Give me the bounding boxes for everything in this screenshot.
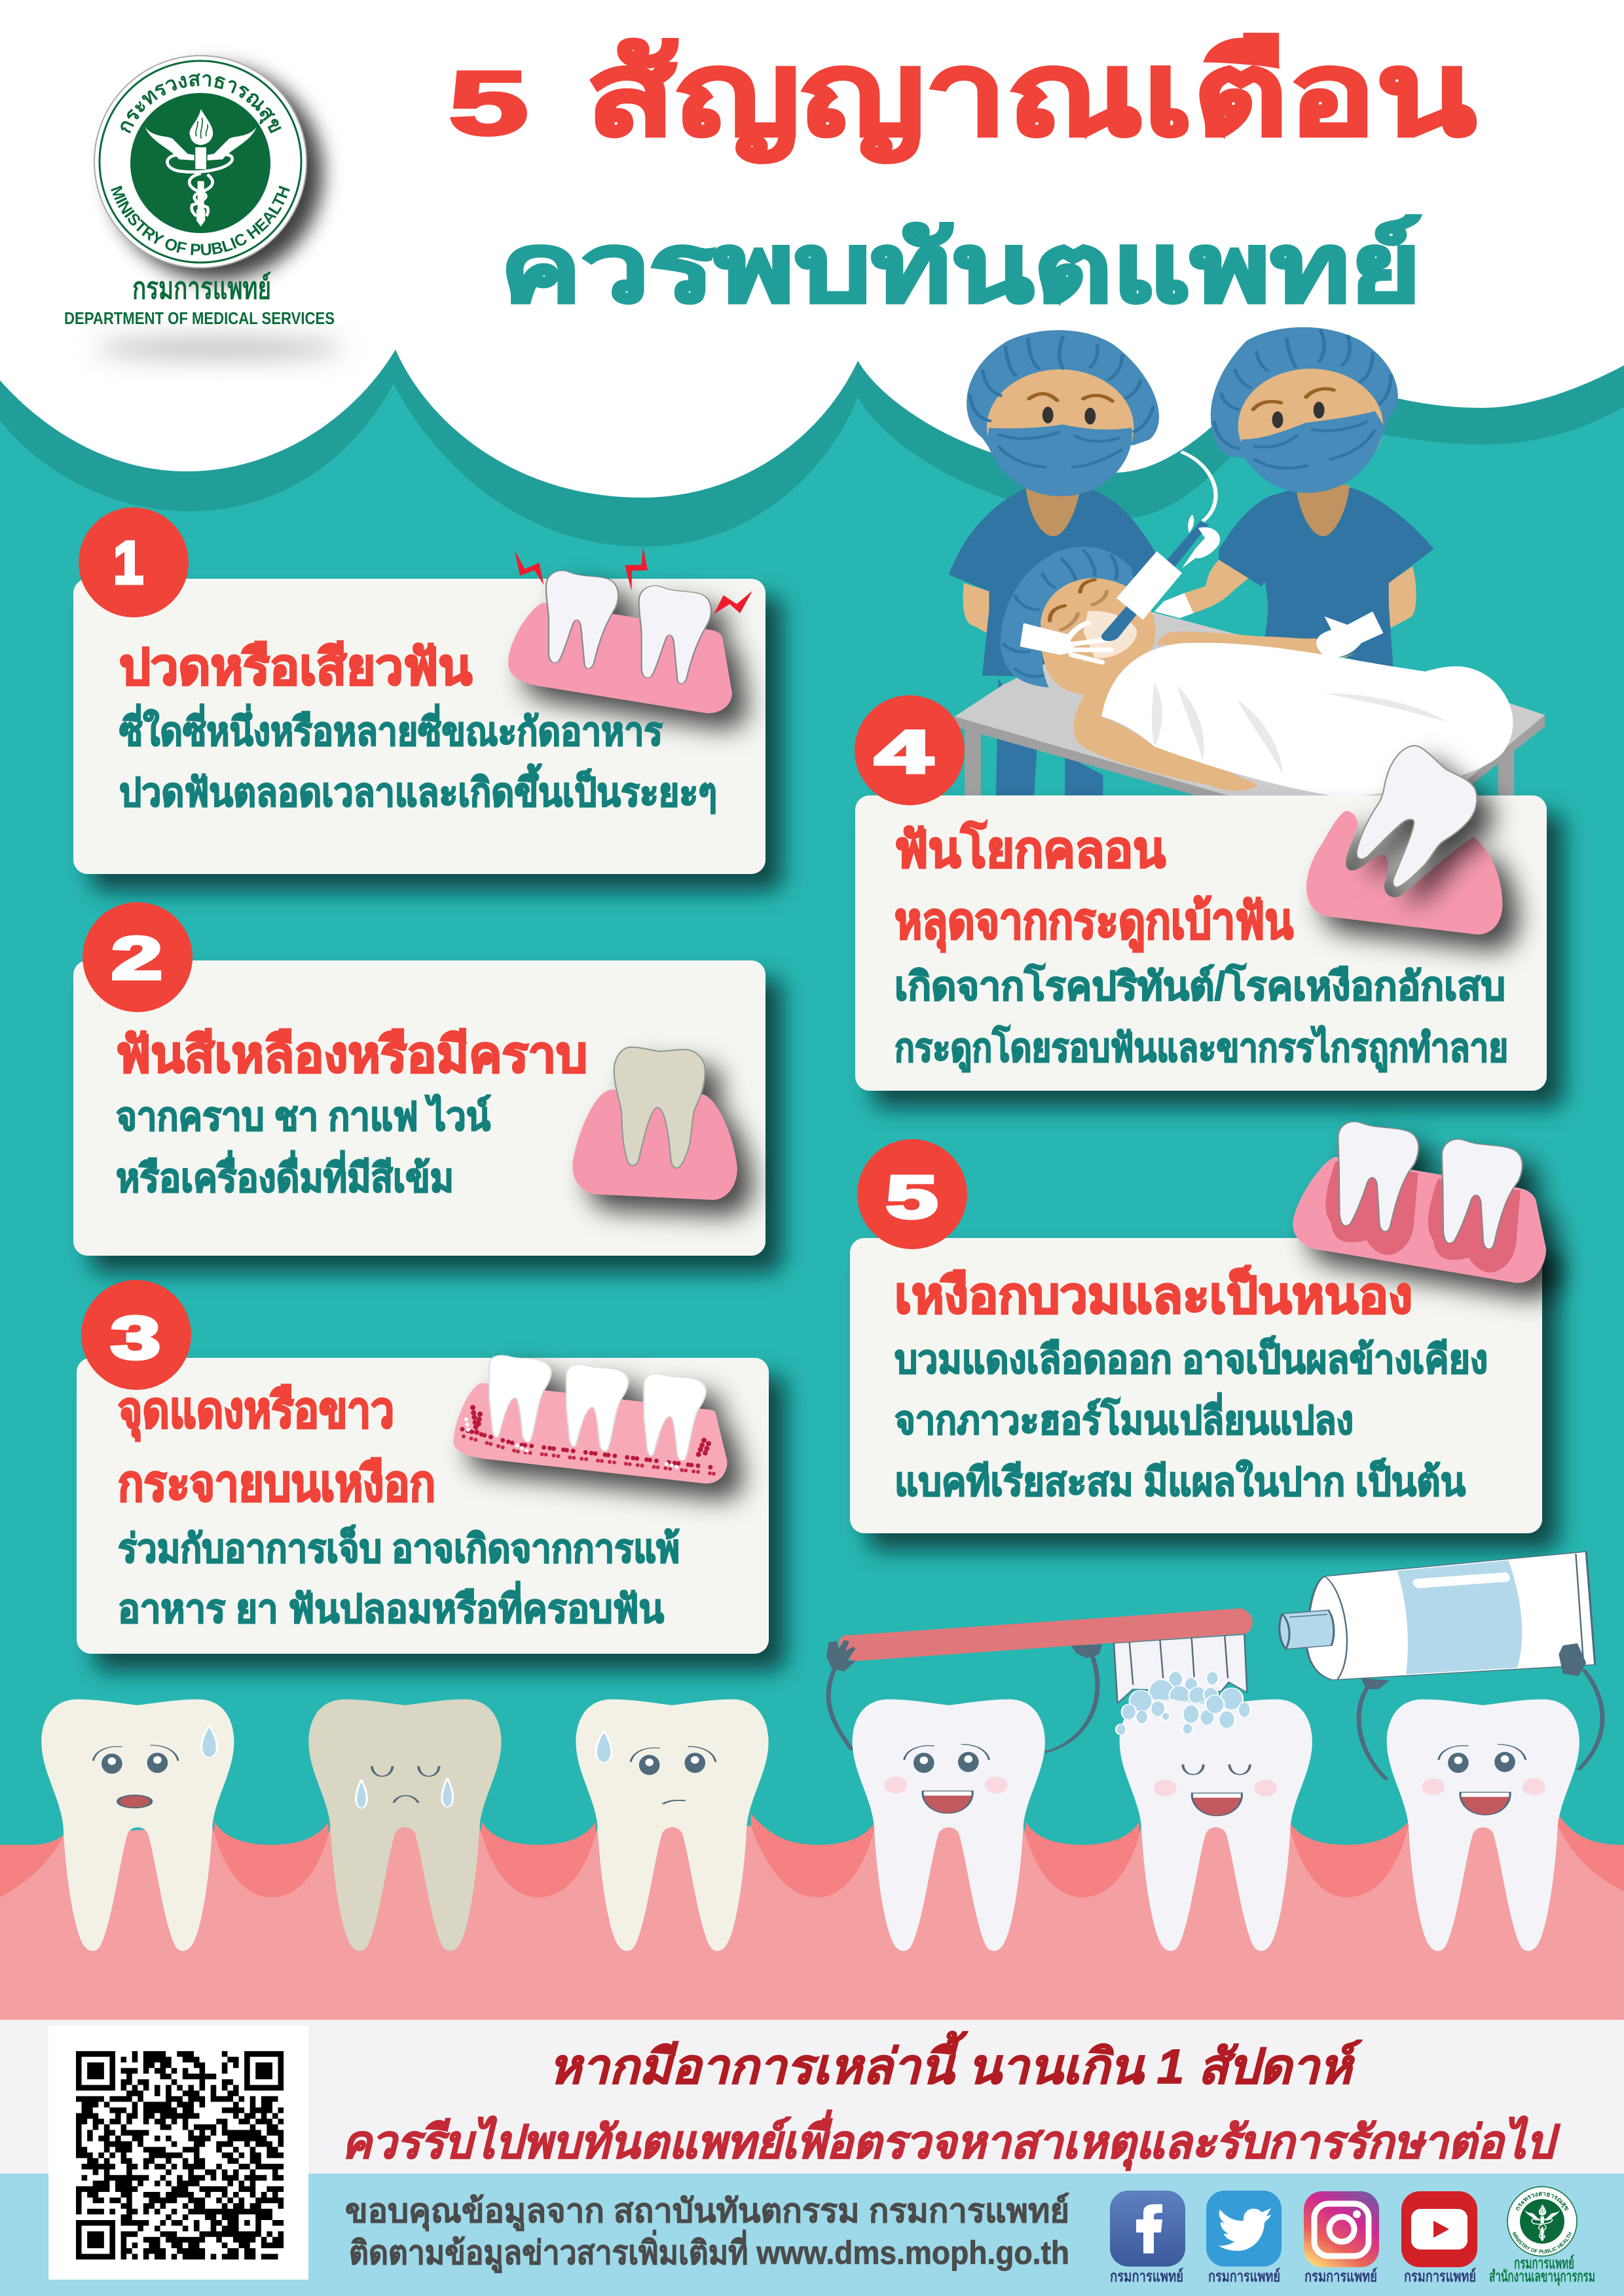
tooth 4: happy bbox=[853, 1700, 1045, 1951]
brush bubbles overlay bbox=[1116, 1688, 1251, 1735]
toothbrush handle bbox=[839, 1609, 1253, 1661]
body line 2: กระดูกโดยรอบฟันและขากรรไกรถูกทำลาย bbox=[895, 1025, 1508, 1072]
warning line 2: ควรรีบไปพบทันตแพทย์เพื่อตรวจหาสาเหตุและรับการรักษาต่อไป bbox=[342, 2109, 1560, 2171]
body line 2: อาหาร ยา ฟันปลอมหรือที่ครอบฟัน bbox=[118, 1581, 664, 1631]
department name thai: กรมการแพทย์ bbox=[132, 271, 271, 305]
number badge 4 bbox=[855, 695, 965, 805]
body line 1: บวมแดงเลือดออก อาจเป็นผลข้างเคียง bbox=[895, 1336, 1488, 1381]
body line 2: หรือเครื่องดื่มที่มีสีเข้ม bbox=[116, 1150, 454, 1200]
icon: loose tooth in gum bbox=[1306, 746, 1502, 934]
icon: swollen gums bbox=[1293, 1122, 1546, 1283]
title line 1 bbox=[449, 29, 1476, 163]
patient bbox=[1001, 547, 1513, 797]
heading line 1: จุดแดงหรือขาว bbox=[118, 1383, 394, 1442]
number badge 1: 1 bbox=[113, 530, 143, 596]
number badge 3 bbox=[81, 1280, 191, 1390]
panel 3: red or white spots bbox=[77, 1280, 769, 1654]
card background bbox=[73, 960, 766, 1256]
small ministry seal: MINISTRY OF PUBLIC HEALTH bbox=[1513, 2231, 1572, 2253]
qr code bbox=[48, 2026, 308, 2280]
arms bbox=[828, 1654, 1602, 1779]
toothpaste tube bbox=[1280, 1552, 1595, 1680]
toothbrush bristles bbox=[1114, 1635, 1247, 1704]
number badge 1 bbox=[79, 507, 189, 617]
seal: กระทรวงสาธารณสุข bbox=[120, 73, 282, 134]
icon: twitter bbox=[1206, 2191, 1282, 2286]
icon: youtube bbox=[1401, 2191, 1477, 2286]
footer band: credits bbox=[0, 2174, 1624, 2296]
seal: MINISTRY OF PUBLIC HEALTH bbox=[111, 185, 290, 255]
illustration: dentists treating patient bbox=[949, 327, 1545, 797]
number badge 5 bbox=[857, 1139, 967, 1249]
card background bbox=[77, 1358, 769, 1654]
body line 2: จากภาวะฮอร์โมนเปลี่ยนแปลง bbox=[895, 1393, 1354, 1442]
body line 2: ปวดฟันตลอดเวลาและเกิดขึ้นเป็นระยะๆ bbox=[119, 763, 717, 814]
heading line 2: กระจายบนเหงือก bbox=[118, 1456, 435, 1512]
icon: twitter: กรมการแพทย์ bbox=[1208, 2267, 1280, 2286]
body line 1: เกิดจากโรคปริทันต์/โรคเหงือกอักเสบ bbox=[895, 963, 1505, 1008]
department name english: DEPARTMENT OF MEDICAL SERVICES bbox=[64, 308, 335, 328]
seal bbox=[94, 51, 333, 295]
body line 1: จากคราบ ชา กาแฟ ไวน์ bbox=[116, 1093, 491, 1139]
small ministry seal bbox=[1489, 2186, 1595, 2287]
panel 5: swollen gums bbox=[850, 1122, 1546, 1533]
body line 3: แบคทีเรียสะสม มีแผลในปาก เป็นต้น bbox=[895, 1458, 1466, 1504]
panel 4: loose tooth bbox=[855, 695, 1547, 1091]
icon: instagram: กรมการแพทย์ bbox=[1304, 2267, 1377, 2286]
icon: spotted gums bbox=[453, 1355, 728, 1484]
tooth 6: happy bbox=[1387, 1700, 1579, 1951]
wave: white header area bbox=[0, 0, 1624, 498]
card background bbox=[855, 795, 1547, 1091]
table bbox=[955, 611, 1545, 797]
gums band bbox=[0, 1813, 1624, 2020]
doctor 1 bbox=[949, 330, 1159, 795]
dental hose bbox=[1181, 452, 1216, 521]
small ministry seal: กรมการแพทย์ bbox=[1514, 2254, 1574, 2272]
icon: aching teeth bbox=[508, 571, 732, 713]
panel 2: stained teeth bbox=[73, 902, 766, 1256]
gloves and dental scaler bbox=[1020, 515, 1383, 662]
body line 1: ซี่ใดซี่หนึ่งหรือหลายซี่ขณะกัดอาหาร bbox=[119, 704, 663, 754]
heading: ฟันสีเหลืองหรือมีคราบ bbox=[116, 1027, 587, 1083]
icon: pain sparks bbox=[515, 547, 752, 614]
title line 1: สัญญาณเตือน bbox=[586, 29, 1476, 163]
website line: ติดตามข้อมูลข่าวสารเพิ่มเติมที่ www.dms.moph.go.th bbox=[349, 2230, 1069, 2273]
tooth 3: worried bbox=[576, 1700, 769, 1951]
tooth 1: surprised bbox=[41, 1700, 234, 1951]
heading: เหงือกบวมและเป็นหนอง bbox=[895, 1266, 1412, 1324]
icon: facebook: กรมการแพทย์ bbox=[1110, 2267, 1183, 2286]
panel 1: toothache bbox=[73, 507, 766, 874]
tooth 2: crying, stained bbox=[308, 1700, 501, 1951]
hand bbox=[1071, 1645, 1102, 1658]
icon: facebook bbox=[1110, 2191, 1185, 2286]
title line 1: 5 bbox=[449, 53, 528, 154]
hands on tube bbox=[1361, 1643, 1586, 1689]
card background bbox=[850, 1238, 1542, 1533]
number badge 4: 4 bbox=[875, 719, 932, 786]
body line 1: ร่วมกับอาการเจ็บ อาจเกิดจากการแพ้ bbox=[118, 1525, 680, 1571]
credit line: ขอบคุณข้อมูลจาก สถาบันทันตกรรม กรมการแพทย์ bbox=[345, 2193, 1069, 2231]
heading line 2: หลุดจากกระดูกเบ้าฟัน bbox=[895, 894, 1293, 953]
red and white spots on gum bbox=[462, 1408, 715, 1474]
logo block: ministry seal and department name bbox=[64, 51, 343, 372]
icon: youtube: กรมการแพทย์ bbox=[1404, 2267, 1476, 2286]
heading line 1: ฟันโยกคลอน bbox=[895, 820, 1166, 878]
foam bubbles bbox=[1116, 1671, 1251, 1735]
hand on brush bbox=[826, 1640, 856, 1671]
heading: ปวดหรือเสียวฟัน bbox=[119, 640, 472, 695]
number badge 3: 3 bbox=[111, 1305, 160, 1372]
card background bbox=[73, 579, 766, 874]
footer band: warning message bbox=[0, 2020, 1624, 2174]
doctor 2 bbox=[1185, 327, 1434, 670]
title line 2: ควรพบทันตแพทย์ bbox=[500, 215, 1421, 321]
wave: dark teal band bbox=[0, 0, 1624, 547]
icon: instagram bbox=[1304, 2191, 1379, 2286]
number badge 2: 2 bbox=[111, 925, 162, 992]
number badge 5: 5 bbox=[886, 1164, 938, 1231]
icon: yellow tooth bbox=[572, 1047, 737, 1200]
tooth 5: brushing bbox=[1120, 1700, 1312, 1951]
small ministry seal: กระทรวงสาธารณสุข bbox=[1516, 2192, 1569, 2211]
row of tooth characters bbox=[41, 1700, 1579, 1951]
toothbrush, paste and arms bbox=[826, 1552, 1602, 1779]
number badge 2 bbox=[83, 902, 193, 1012]
warning line 1: หากมีอาการเหล่านี้ นานเกิน 1 สัปดาห์ bbox=[549, 2031, 1362, 2094]
